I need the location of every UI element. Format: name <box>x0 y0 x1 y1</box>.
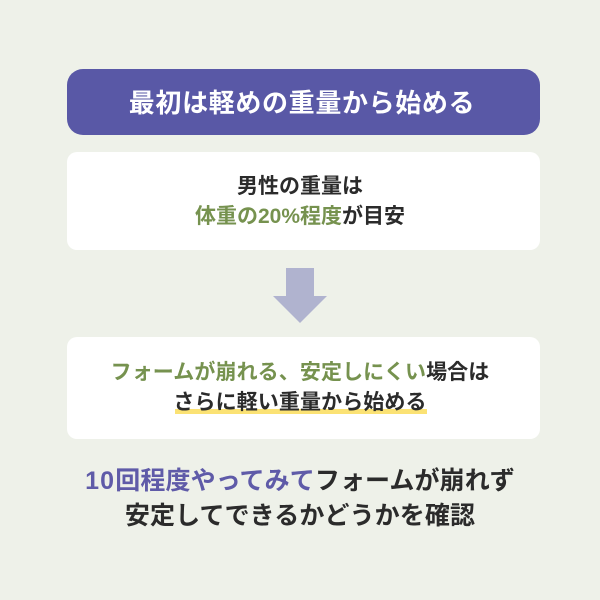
arrow: down <box>273 268 327 323</box>
panel: male weight guide <box>67 152 540 250</box>
text: lighter weight advice: フォームが崩れる、安定しにくい場合は <box>111 361 489 384</box>
underline highlight <box>175 409 427 414</box>
text: male weight guide: 体重の20%程度が目安 <box>195 205 405 228</box>
closing text: 10回程度やってみてフォームが崩れず <box>85 467 515 495</box>
closing text: 安定してできるかどうかを確認 <box>125 502 475 530</box>
panel: lighter weight advice <box>67 337 540 439</box>
text: lighter weight advice: さらに軽い重量から始める <box>173 391 427 414</box>
closing text <box>85 467 515 530</box>
text: male weight guide: 男性の重量は <box>237 175 363 198</box>
text: lighter weight advice <box>111 360 489 414</box>
title banner <box>67 69 540 135</box>
title text: 最初は軽めの重量から始める <box>129 88 475 118</box>
text: male weight guide <box>195 174 405 228</box>
